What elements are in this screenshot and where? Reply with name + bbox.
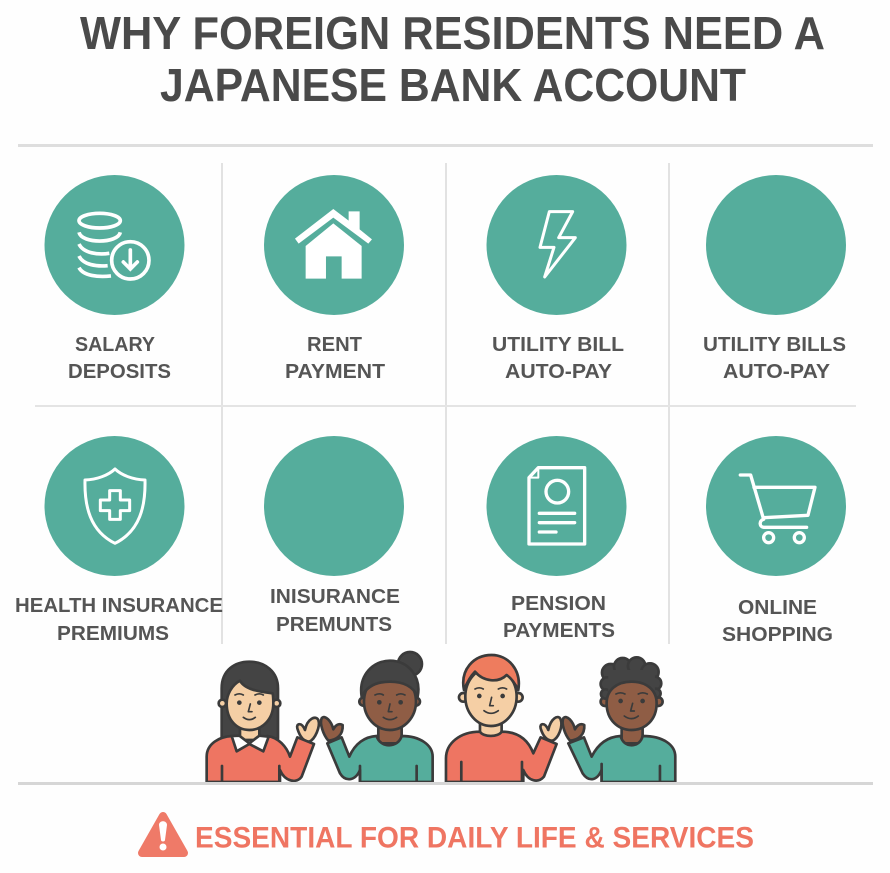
label: [503, 592, 615, 642]
title: WHY FOREIGN RESIDENTS NEED A: [80, 7, 825, 59]
label: PENSION: [511, 592, 606, 615]
label: [722, 596, 833, 646]
callout: essential for daily life: ESSENTIAL FOR DAILY LIFE & SERVICES: [195, 822, 754, 854]
label: [285, 333, 385, 383]
icon: document: [529, 468, 585, 544]
label: INISURANCE: [270, 585, 400, 608]
label: UTILITY BILLS: [703, 333, 846, 356]
label: RENT: [307, 333, 362, 356]
label: PREMIUMS: [57, 622, 169, 645]
person 3: [446, 655, 561, 782]
panel: insurance premiums: [264, 436, 404, 636]
label: HEALTH INSURANCE: [15, 594, 223, 617]
label: [68, 333, 171, 383]
label: [703, 333, 846, 383]
icon: shopping cart: [740, 475, 815, 543]
person 2: [321, 652, 433, 782]
panel: salary deposits: [44, 175, 184, 383]
person 4: [563, 657, 675, 782]
icon: lightning bolt: [540, 212, 575, 277]
label: [492, 333, 624, 383]
label: PAYMENT: [285, 360, 385, 383]
label: [15, 594, 223, 645]
panel: utility bill auto-pay: [486, 175, 626, 383]
illustration: four people waving: [207, 652, 675, 782]
panel: online shopping: [706, 436, 846, 646]
label: AUTO-PAY: [723, 360, 830, 383]
icon: house: [295, 209, 372, 279]
panel: pension payments: [486, 436, 626, 642]
title: JAPANESE BANK ACCOUNT: [160, 59, 746, 111]
icon: warning triangle: [142, 816, 184, 853]
label: UTILITY BILL: [492, 333, 624, 356]
panel: utility bills auto-pay: [703, 175, 846, 383]
label: SALARY: [75, 333, 155, 356]
label: DEPOSITS: [68, 360, 171, 383]
panel: rent payment: [264, 175, 404, 383]
label: [270, 585, 400, 636]
label: PREMUNTS: [276, 613, 392, 636]
icon: coins with down arrow: [79, 213, 149, 279]
panel: health insurance premiums: [15, 436, 223, 645]
label: SHOPPING: [722, 623, 833, 646]
label: ONLINE: [738, 596, 817, 619]
label: PAYMENTS: [503, 619, 615, 642]
label: AUTO-PAY: [505, 360, 612, 383]
icon: shield with cross: [85, 469, 145, 543]
title: [80, 7, 825, 111]
person 1: [207, 662, 319, 782]
